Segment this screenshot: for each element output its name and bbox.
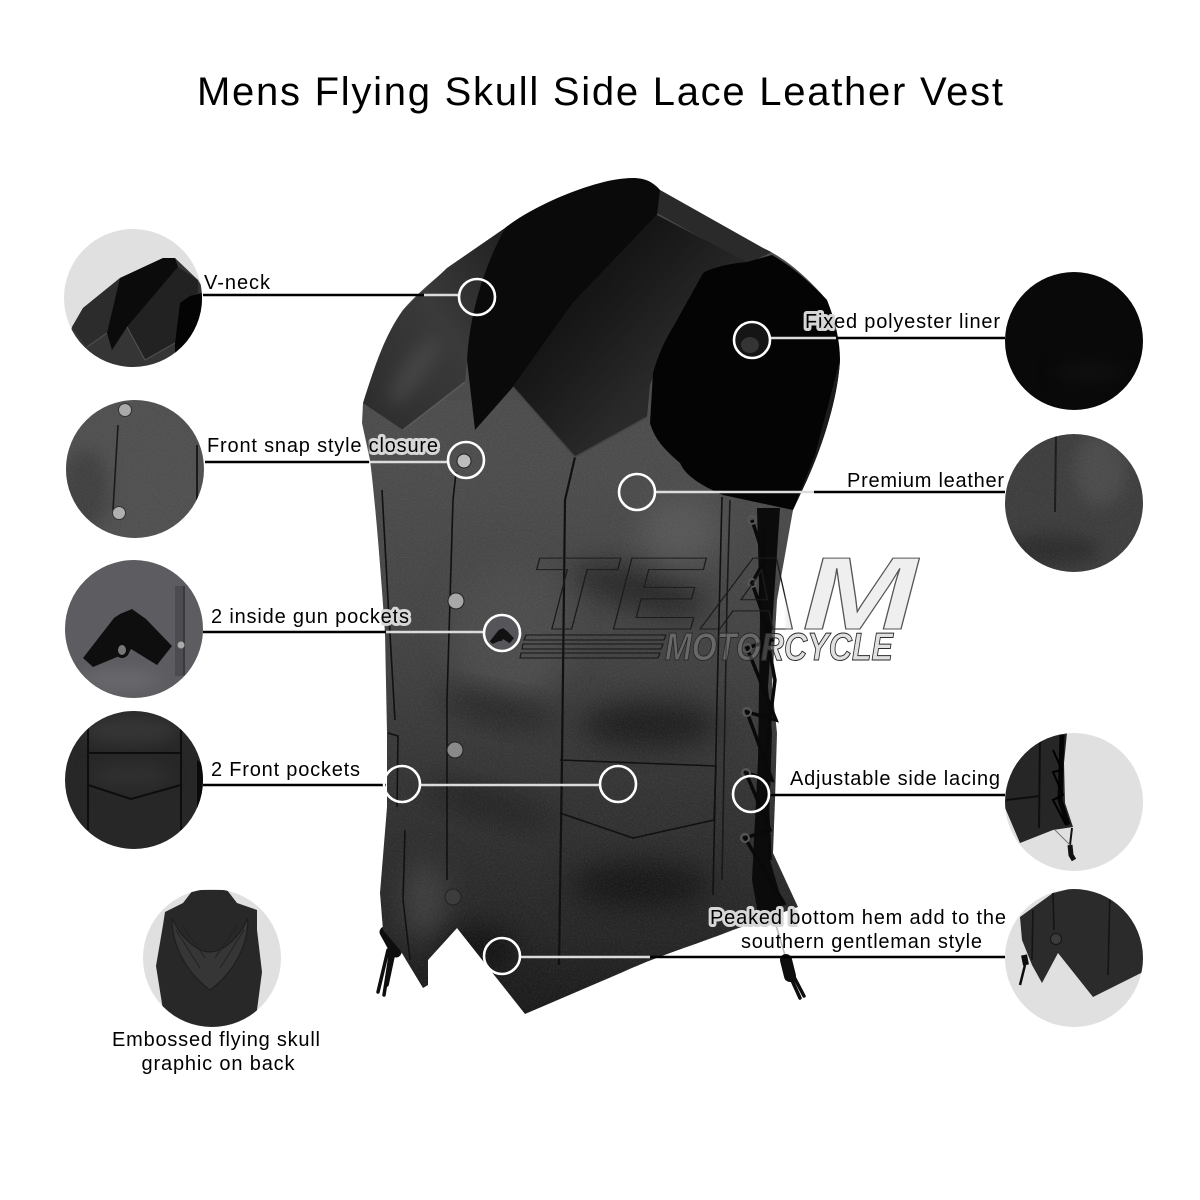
callout: premium leather: Premium leather (847, 470, 1004, 492)
left lapel panel (363, 228, 505, 430)
callout: gun pockets: 2 inside gun pockets (211, 606, 409, 628)
thumbnail: V-neck (64, 229, 202, 367)
callout: polyester liner (734, 311, 1005, 358)
callout: embossed graphic caption (112, 1029, 320, 1075)
callout: front snap closure (205, 435, 484, 478)
thumbnail: side lacing (1005, 733, 1143, 871)
callout: embossed graphic caption: graphic on back (142, 1053, 296, 1075)
armhole lining (650, 255, 840, 510)
callout: front snap closure: Front snap style closure (207, 435, 438, 457)
seams and pocket flaps (382, 382, 730, 965)
lacing gap (752, 508, 783, 925)
leather shading (360, 178, 850, 1020)
thumbnail: liner (1005, 272, 1143, 410)
callout: V-neck (203, 272, 495, 315)
watermark logo (520, 536, 920, 669)
callout: gun pockets (203, 606, 520, 651)
snap buttons (445, 454, 471, 905)
callout: premium leather (619, 470, 1005, 510)
logo speed stripes (520, 635, 666, 658)
thumbnail: front pocket (65, 711, 203, 849)
inner neck lining (467, 178, 660, 430)
callout: front pockets (203, 759, 636, 802)
callout: front pockets: 2 Front pockets (211, 759, 360, 781)
thumbnail: gun pocket (65, 560, 203, 698)
title: Mens Flying Skull Side Lace Leather Vest (197, 70, 1003, 114)
callout: peaked hem: southern gentleman style (741, 931, 982, 953)
thumbnail: embossed back (143, 889, 281, 1027)
callout: polyester liner: Fixed polyester liner (805, 311, 1000, 333)
flying skull wings (172, 918, 248, 990)
back collar strip (657, 188, 772, 264)
callout: peaked hem: Peaked bottom hem add to the (710, 907, 1006, 929)
side lacing with eyelets (741, 516, 785, 905)
vest body (362, 178, 840, 1014)
thumbnail: peaked hem (1005, 889, 1143, 1027)
main vest photo (360, 178, 850, 1020)
side tassels (378, 905, 804, 998)
gun icon (83, 609, 172, 667)
watermark logo: MOTORCYCLE (665, 626, 894, 669)
right lapel panel (513, 215, 747, 457)
thumbnail: snap closure (66, 400, 204, 538)
callout: embossed graphic caption: Embossed flying skull (112, 1029, 320, 1051)
callout: side lacing: Adjustable side lacing (790, 768, 1000, 790)
mini gun in marker (490, 628, 514, 644)
callout: V-neck: V-neck (204, 272, 271, 294)
watermark logo: TEAM (527, 536, 920, 651)
callout: side lacing (733, 768, 1005, 812)
thumbnail: premium leather (1005, 434, 1143, 572)
tassel (1070, 828, 1072, 845)
leather grain (360, 400, 800, 1020)
callout: peaked hem (484, 907, 1006, 974)
